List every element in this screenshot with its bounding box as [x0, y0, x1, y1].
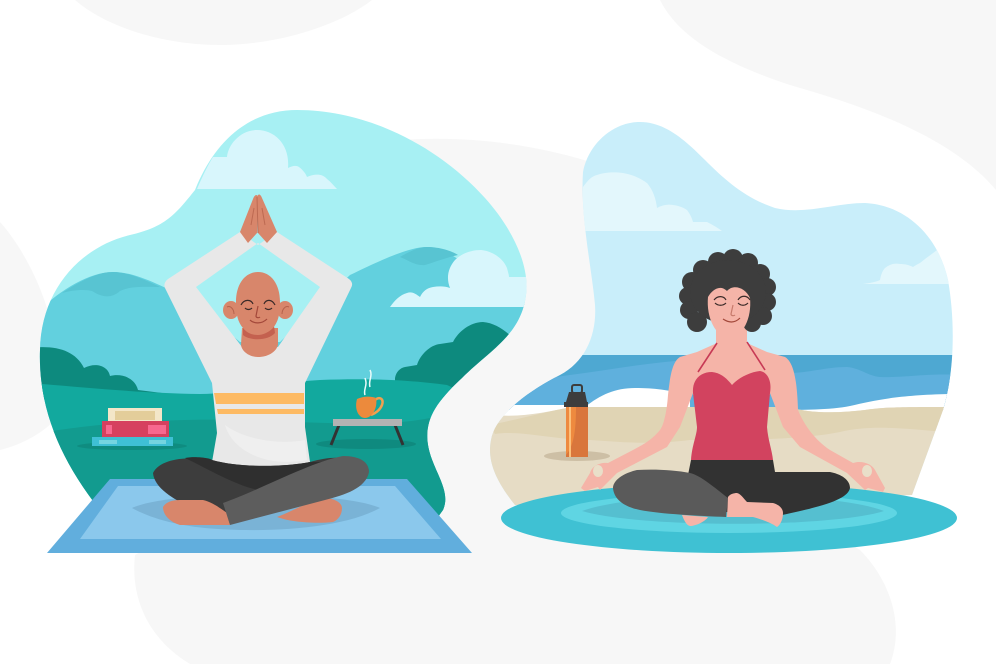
sand — [490, 407, 944, 505]
woman: chest — [693, 358, 770, 395]
man: head — [236, 272, 280, 335]
woman: hair — [679, 249, 776, 332]
man: left foot — [163, 500, 230, 525]
woman: neck — [716, 325, 747, 350]
cloud: right scene — [390, 250, 530, 307]
cloud: beach upper left — [583, 172, 722, 231]
icon: stack of books — [92, 408, 173, 446]
woman: far foot — [682, 515, 708, 526]
man: ears — [223, 301, 293, 319]
man: orange stripes — [214, 393, 304, 414]
man: upper crossed leg — [223, 456, 369, 525]
sea — [480, 355, 970, 410]
figure: man meditating — [153, 194, 369, 525]
shadow: bottle — [544, 451, 610, 461]
mountains — [30, 247, 540, 420]
panel: right beach scene — [480, 110, 970, 510]
sea lighter waves — [480, 360, 960, 410]
woman: face — [708, 287, 750, 338]
woman: pants — [688, 460, 850, 515]
woman: near foot — [727, 493, 783, 527]
man: right foot — [277, 498, 342, 523]
rug: round teal mat — [501, 483, 957, 553]
mountain shading — [62, 247, 458, 296]
cloud: beach right — [863, 250, 952, 284]
woman: lighter left leg — [613, 470, 728, 517]
tree line: left — [40, 347, 162, 400]
man: neck — [241, 328, 278, 357]
man: face details — [241, 300, 275, 323]
panel: left mountain scene — [40, 110, 527, 516]
woman: face details — [714, 296, 750, 322]
man: shirt shading — [225, 425, 307, 462]
woman: left hand ring — [593, 465, 603, 477]
cloud: upper left scene — [197, 130, 337, 189]
icon: water bottle — [564, 385, 588, 457]
woman: straps — [698, 342, 765, 372]
foam — [504, 388, 947, 416]
shadow: table — [316, 439, 416, 449]
rug: left blue mat — [47, 479, 472, 553]
man: shirt and raised arms — [164, 232, 352, 468]
shadow: books — [77, 442, 187, 450]
meadow lower band — [54, 418, 446, 516]
man: crossed legs — [153, 456, 369, 525]
sand darker band — [490, 407, 960, 443]
man: neck shadow — [243, 326, 275, 339]
figure: woman meditating — [581, 249, 885, 527]
man: hands in prayer — [240, 194, 277, 243]
icon: coffee cup with steam — [356, 370, 383, 418]
meadow — [42, 379, 452, 516]
illustration: two people meditating — [40, 110, 957, 553]
woman: red top — [691, 371, 773, 460]
tree line: right — [395, 322, 515, 400]
woman: right hand ring — [862, 465, 872, 477]
icon: low table — [331, 419, 403, 445]
woman: arms and shoulders — [581, 343, 885, 492]
